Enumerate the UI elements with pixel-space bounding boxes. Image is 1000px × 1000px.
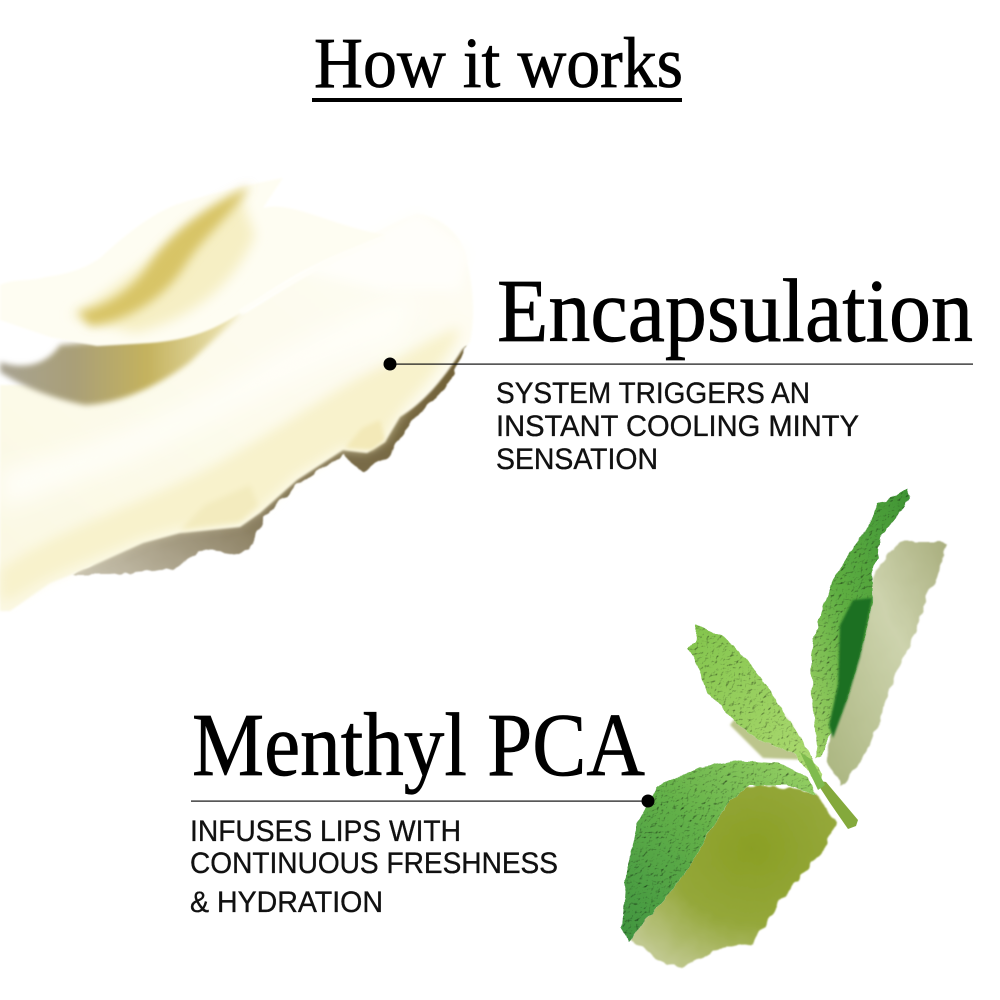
cream detail: folds near tip — [345, 420, 385, 450]
callout: Menthyl PCA — [190, 696, 654, 919]
mint leaf: top dark fold — [829, 598, 872, 738]
image: cream swatch — [0, 178, 473, 611]
description: & HYDRATION — [190, 886, 383, 919]
mint leaf: bottom — [622, 760, 817, 943]
description: CONTINUOUS FRESHNESS — [190, 847, 558, 880]
mint shadow: middle leaf — [730, 700, 810, 760]
cream highlight: top right fade — [300, 210, 470, 290]
heading: Menthyl PCA: Menthyl PCA — [192, 696, 645, 795]
cream body: main swipe — [0, 214, 473, 611]
cream shadow: under upper lobe — [0, 310, 245, 405]
description: INFUSES LIPS WITH — [190, 815, 461, 848]
callout: Encapsulation — [384, 262, 973, 476]
description — [190, 815, 558, 919]
heading: Encapsulation: Encapsulation — [497, 262, 973, 361]
title text: How it works — [314, 23, 683, 103]
description: SENSATION — [496, 443, 658, 476]
description — [496, 377, 859, 476]
mint leaf: top — [811, 488, 910, 760]
cream tint: upper lobe — [70, 195, 255, 333]
cream upper lobe — [0, 178, 385, 346]
cream highlight — [0, 290, 420, 510]
mint shadow: lower leaf — [630, 785, 835, 967]
image: mint sprig — [622, 488, 947, 967]
description: INSTANT COOLING MINTY — [496, 410, 859, 443]
mint stem — [815, 780, 858, 829]
title underline — [312, 98, 682, 102]
mint shadow: top leaf — [827, 542, 947, 787]
leader line and dot — [384, 358, 973, 370]
cream shadow: lower edge — [75, 345, 467, 574]
title — [312, 23, 683, 103]
cream ridge: white edge — [240, 238, 385, 312]
cream fold: lower band — [0, 327, 459, 600]
description: SYSTEM TRIGGERS AN — [496, 377, 810, 410]
leader line and dot — [191, 794, 654, 808]
mint leaf: middle — [688, 625, 822, 788]
cream crease: golden fold — [78, 186, 250, 326]
